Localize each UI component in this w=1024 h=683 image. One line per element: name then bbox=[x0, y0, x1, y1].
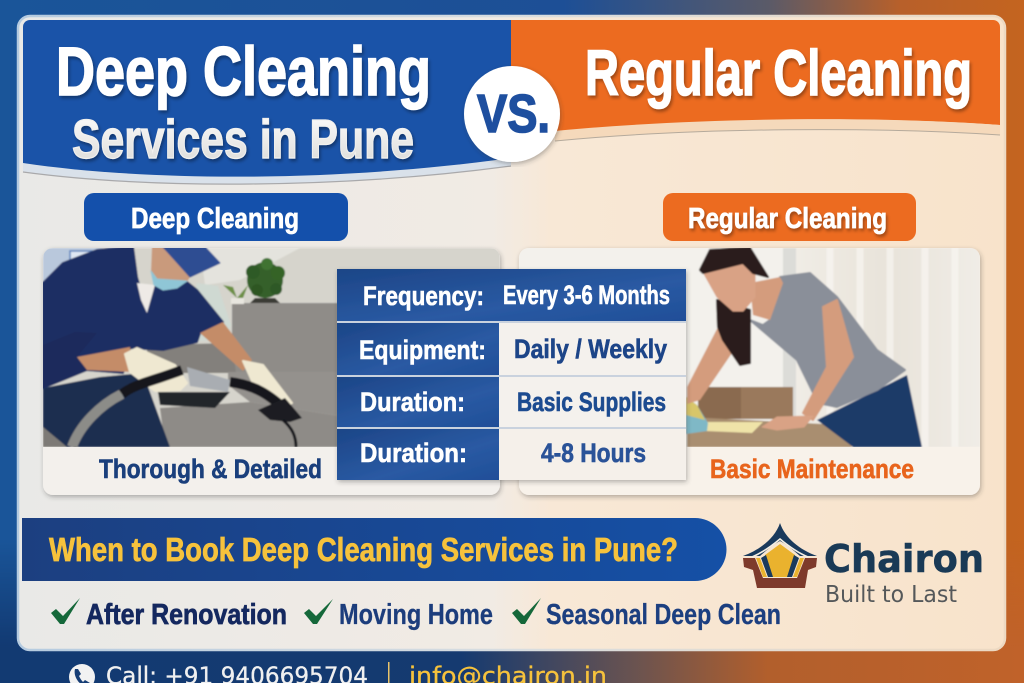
item: seasonal deep clean: Seasonal Deep Clean bbox=[546, 599, 781, 631]
card: deep cleaning bbox=[43, 247, 500, 495]
pill: deep cleaning: Deep Cleaning bbox=[131, 203, 299, 235]
title: deep cleaning services in pune bbox=[56, 33, 431, 170]
row: frequency: Frequency: bbox=[363, 281, 484, 311]
logo: chairon: Chairon bbox=[824, 537, 984, 581]
caption: basic maintenance: Basic Maintenance bbox=[710, 454, 914, 484]
photo: woman wiping table bbox=[686, 248, 976, 447]
item: seasonal deep clean bbox=[512, 598, 781, 631]
caption: thorough and detailed: Thorough & Detailed bbox=[99, 454, 322, 484]
pill: regular cleaning bbox=[663, 193, 916, 241]
photo: technician cleaning sofa bbox=[43, 247, 500, 447]
footer contact bbox=[69, 662, 607, 683]
row: duration supplies: Duration: bbox=[360, 387, 465, 417]
header: regular cleaning bbox=[511, 20, 1000, 141]
cabinet bbox=[697, 386, 742, 420]
checklist bbox=[51, 598, 781, 631]
banner: when to book: When to Book Deep Cleaning Services in Pune? bbox=[49, 531, 678, 568]
row: duration hours bbox=[337, 429, 686, 480]
item: moving home bbox=[304, 599, 493, 631]
vs badge bbox=[464, 66, 560, 162]
row: duration supplies: Basic Supplies bbox=[517, 387, 666, 417]
row: duration hours: 4-8 Hours bbox=[541, 438, 646, 468]
card: regular cleaning bbox=[519, 248, 980, 495]
technician bbox=[43, 247, 292, 447]
item: moving home: Moving Home bbox=[339, 599, 493, 631]
row: duration supplies bbox=[337, 377, 686, 427]
plant bbox=[223, 258, 285, 304]
row: frequency: Every 3-6 Months bbox=[503, 280, 670, 310]
row: equipment: Equipment: bbox=[359, 335, 486, 365]
row: duration hours: Duration: bbox=[360, 438, 467, 468]
title: deep cleaning services in pune: Deep Cleaning bbox=[56, 33, 431, 110]
vacuum bbox=[72, 367, 302, 447]
comparison table bbox=[337, 269, 686, 480]
table bbox=[686, 418, 853, 447]
item: after renovation: After Renovation bbox=[86, 599, 287, 631]
icon: house chair bbox=[743, 523, 817, 588]
pill: regular cleaning: Regular Cleaning bbox=[688, 203, 887, 235]
vs badge: VS. bbox=[477, 84, 550, 144]
pill: deep cleaning bbox=[84, 193, 348, 241]
title: deep cleaning services in pune: Services in Pune bbox=[72, 108, 414, 170]
banner: when to book bbox=[22, 518, 727, 581]
header: deep cleaning bbox=[23, 20, 511, 184]
woman bbox=[687, 248, 922, 447]
row: equipment bbox=[337, 323, 686, 375]
logo: chairon bbox=[743, 523, 984, 608]
row: frequency bbox=[337, 269, 686, 321]
logo: chairon: Built to Last bbox=[825, 582, 957, 608]
row: equipment: Daily / Weekly bbox=[514, 334, 667, 364]
icon: phone bbox=[69, 664, 95, 683]
